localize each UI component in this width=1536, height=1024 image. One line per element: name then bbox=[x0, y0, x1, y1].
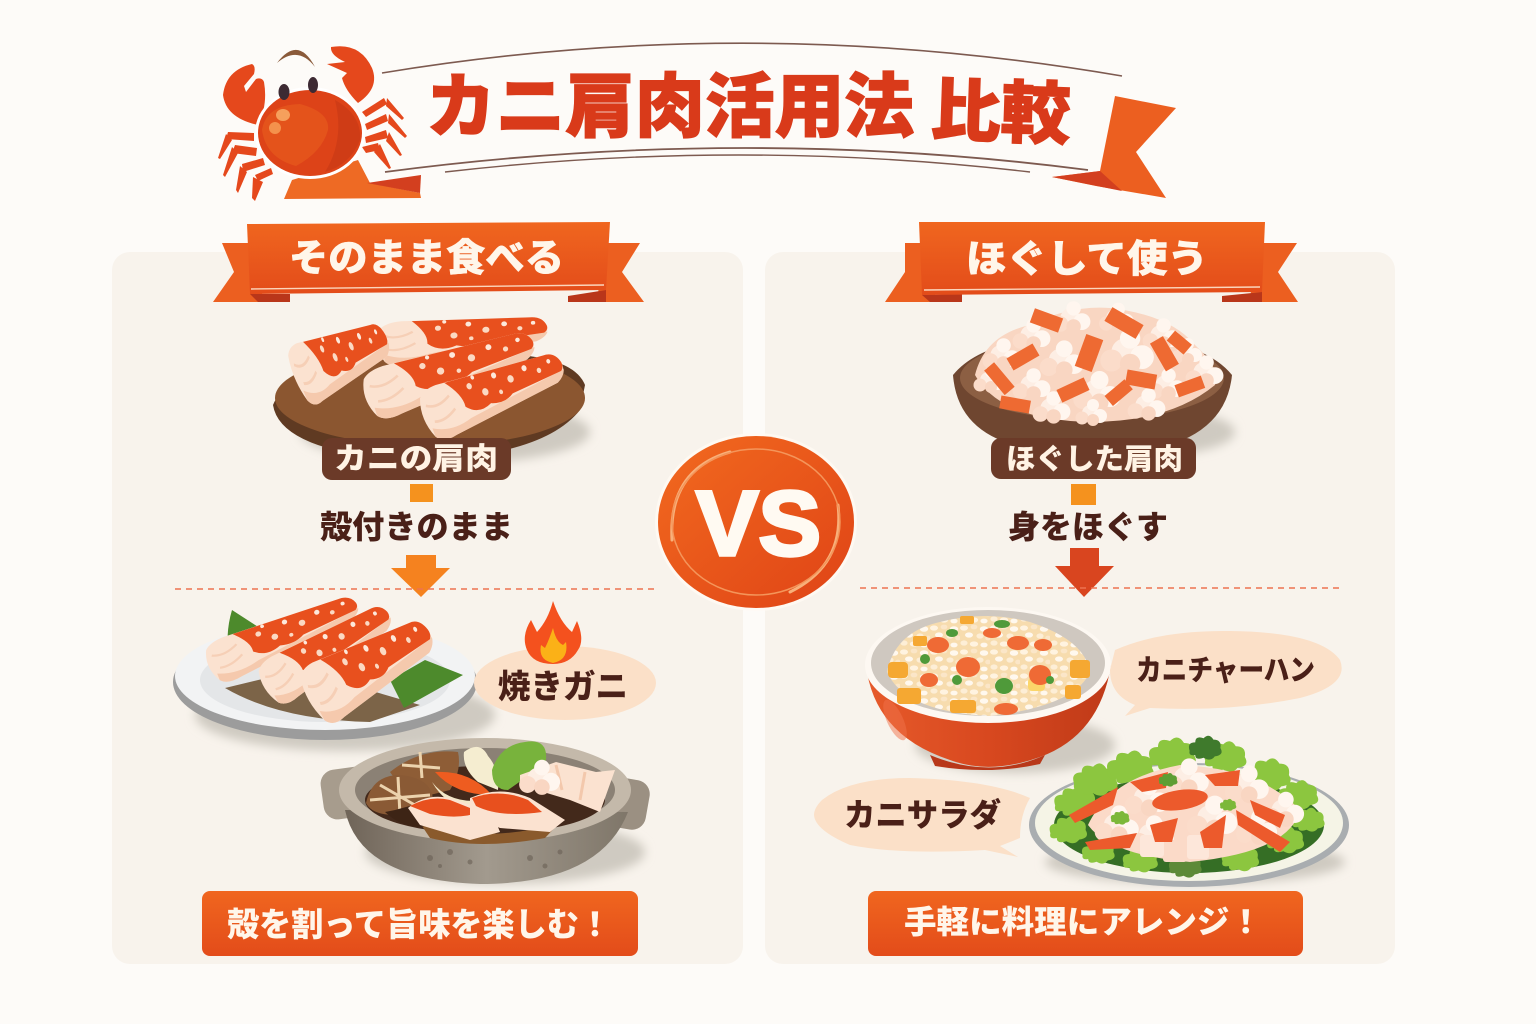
label: カニの肩肉: カニの肩肉 bbox=[334, 434, 498, 478]
illustration: grilled crab plate bbox=[173, 587, 495, 751]
text: 殻付きのまま: 殻付きのまま bbox=[320, 502, 513, 548]
callout: 焼きガニ bbox=[474, 646, 656, 720]
label: ほぐした肩肉: ほぐした肩肉 bbox=[1006, 436, 1183, 478]
arrow right bbox=[1055, 548, 1114, 597]
callout: カニサラダ: カニサラダ bbox=[844, 790, 1001, 836]
illustration: flaked crab in wooden bowl bbox=[953, 301, 1235, 458]
callout: カニチャーハン bbox=[1110, 631, 1342, 716]
illustration: crab hot pot bbox=[319, 738, 652, 884]
illustration: crab shoulder on wooden board bbox=[273, 309, 590, 464]
callout: 焼きガニ: 焼きガニ bbox=[498, 660, 628, 708]
footer band left bbox=[202, 891, 638, 956]
right heading ribbon: ほぐして使う: ほぐして使う bbox=[966, 228, 1208, 283]
connector block left bbox=[410, 484, 433, 502]
callout: カニサラダ bbox=[814, 778, 1030, 857]
VS badge: VS bbox=[696, 473, 821, 575]
icon: crab bbox=[218, 46, 421, 201]
left heading ribbon: そのまま食べる bbox=[213, 222, 644, 302]
VS badge bbox=[655, 433, 857, 611]
panel: right background bbox=[765, 252, 1395, 964]
arrow left bbox=[391, 555, 450, 597]
footer band right: 手軽に料理にアレンジ！ bbox=[904, 897, 1262, 943]
divider left bbox=[175, 588, 657, 590]
callout: カニチャーハン: カニチャーハン bbox=[1136, 647, 1315, 689]
panel: left background bbox=[112, 252, 743, 964]
divider right bbox=[860, 587, 1342, 589]
text: 身をほぐす: 身をほぐす bbox=[1008, 502, 1168, 548]
illustration: crab fried rice bowl bbox=[865, 607, 1115, 773]
title banner lines and ribbon bbox=[382, 43, 1176, 198]
title: 比較 bbox=[929, 55, 1073, 159]
footer band right bbox=[868, 891, 1303, 956]
icon: flame bbox=[525, 601, 581, 664]
right heading ribbon: ほぐして使う bbox=[885, 222, 1298, 302]
connector block right bbox=[1071, 484, 1096, 505]
footer band left: 殻を割って旨味を楽しむ！ bbox=[227, 898, 611, 946]
title: カニ肩肉活用法 bbox=[426, 51, 914, 152]
illustration: crab salad bbox=[1029, 736, 1349, 887]
left heading ribbon: そのまま食べる: そのまま食べる bbox=[289, 227, 564, 282]
